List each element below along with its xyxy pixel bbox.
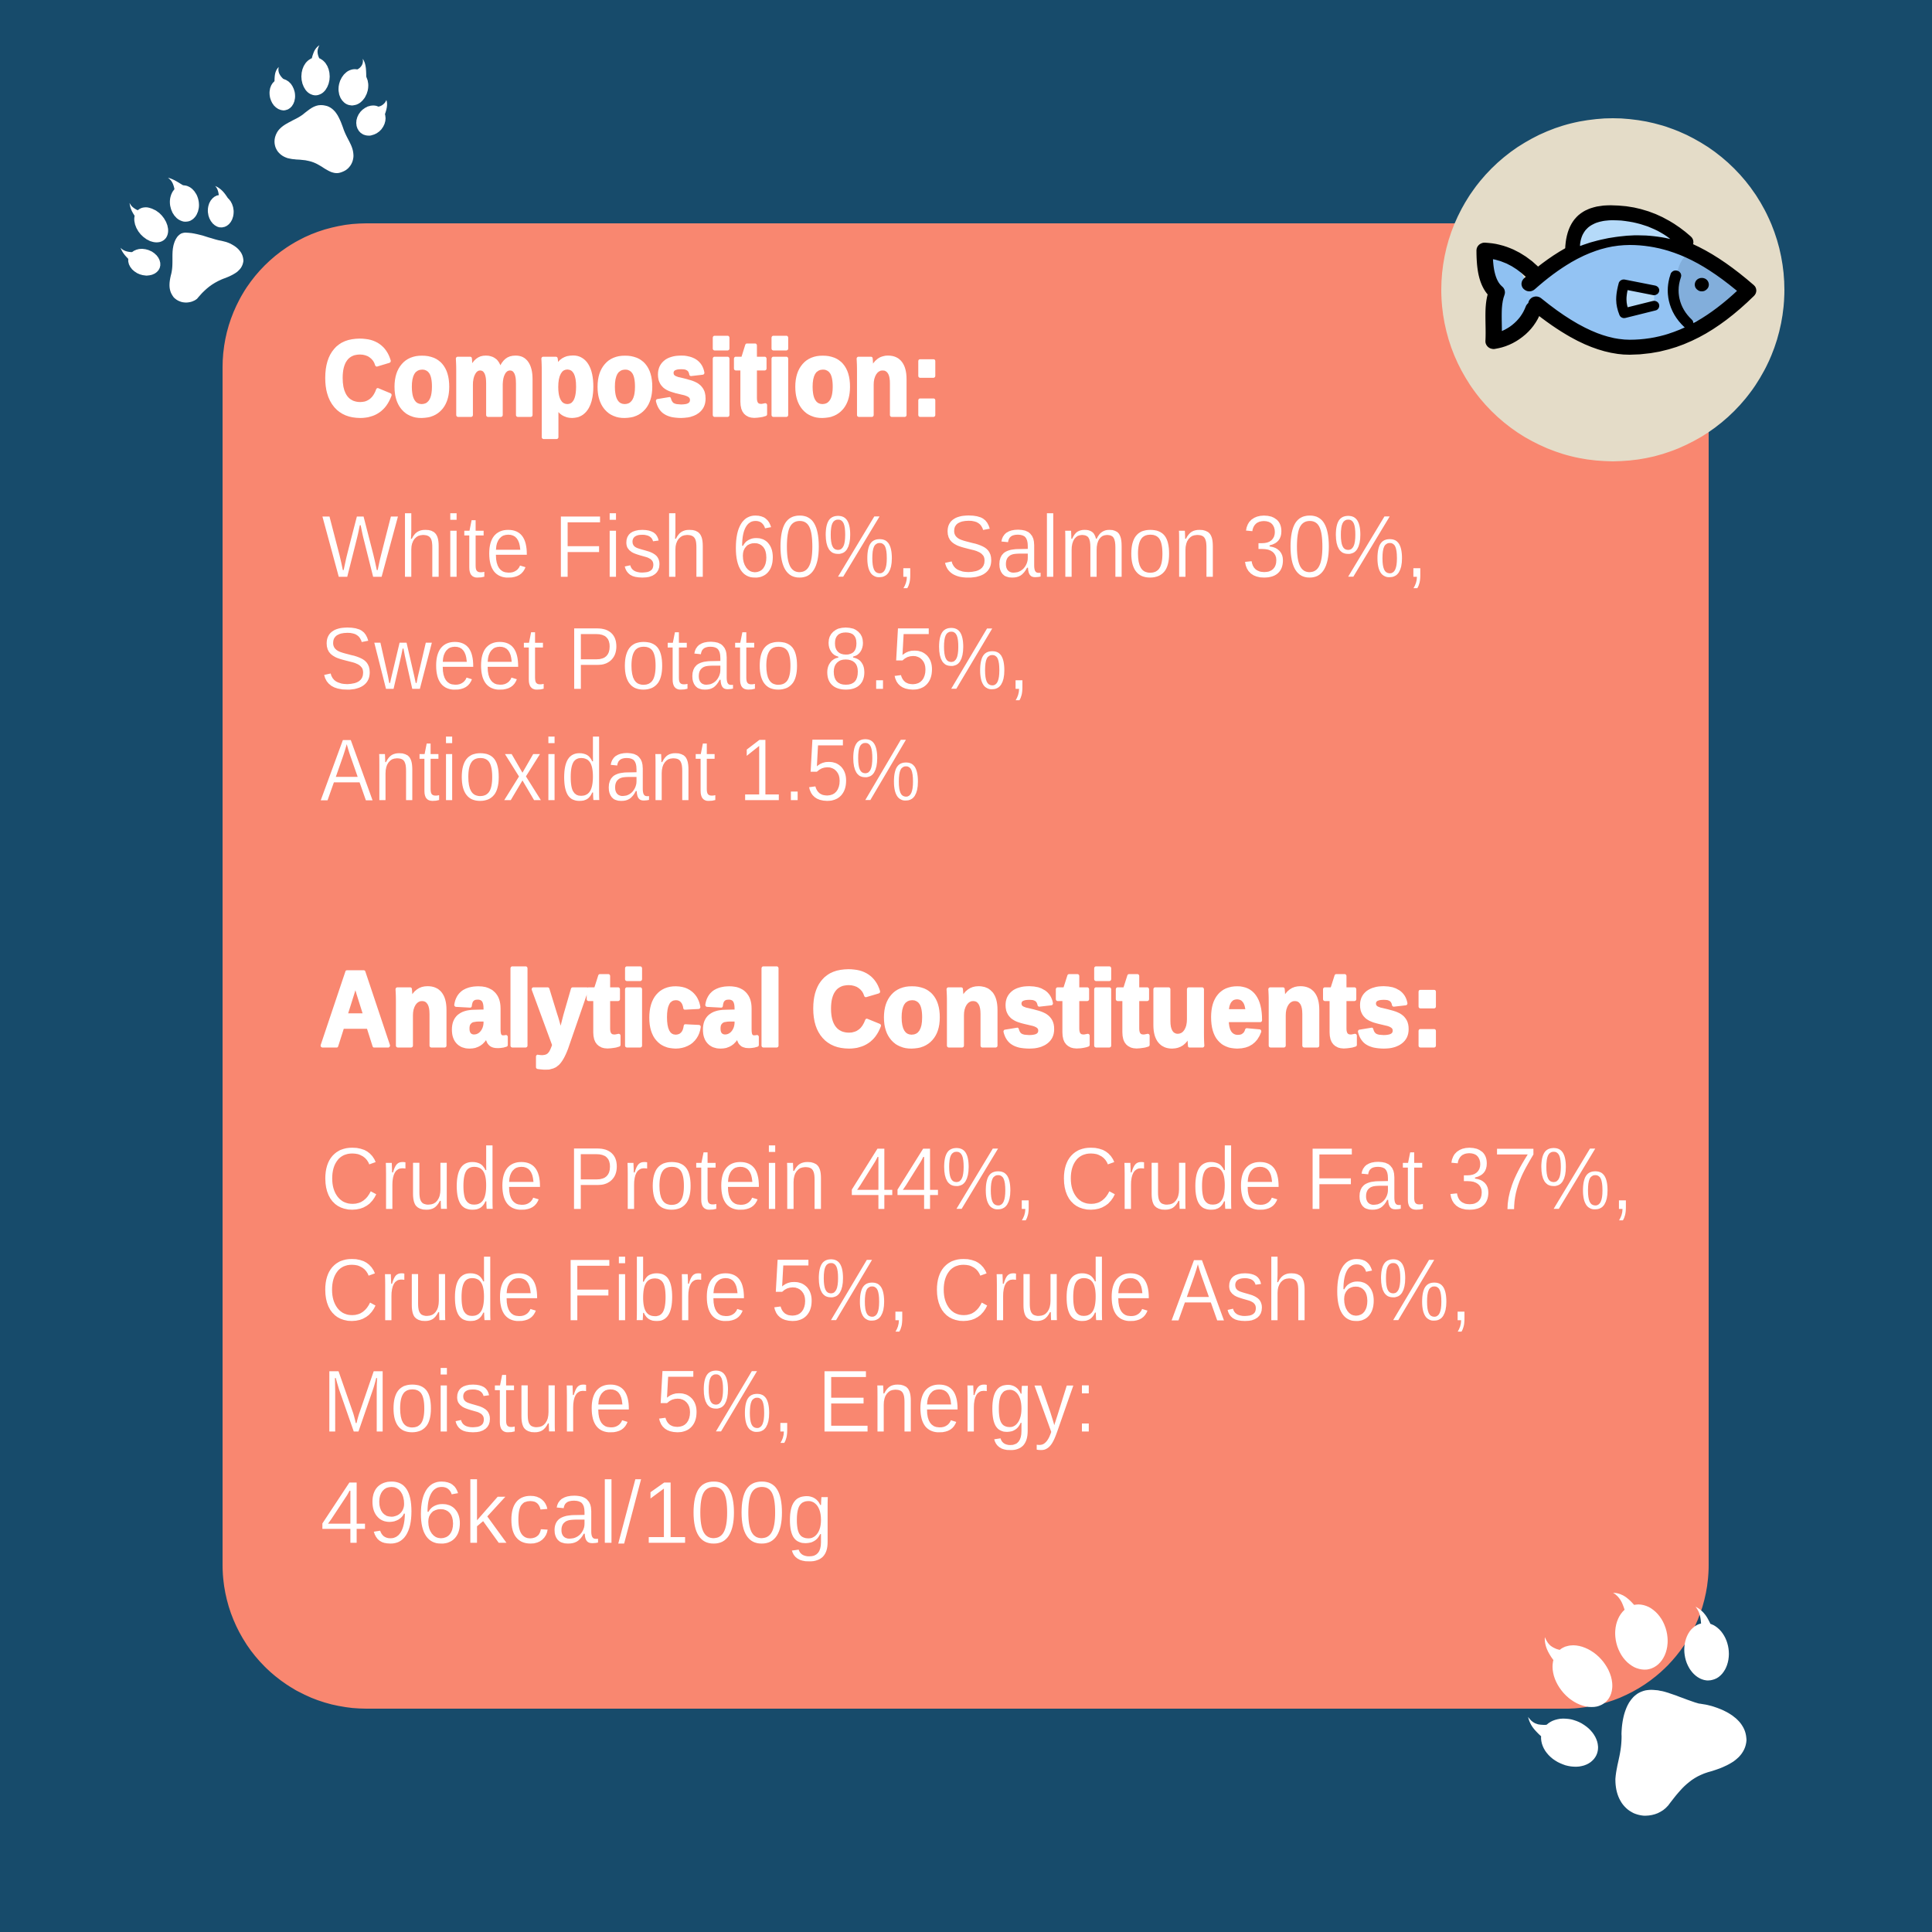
text block: composition list bbox=[320, 498, 1428, 820]
text block: composition list: White Fish 60%, Salmon 30%, bbox=[321, 498, 1428, 597]
icon: fish bbox=[1485, 213, 1748, 347]
heading: Composition: Composition: bbox=[323, 319, 943, 438]
icon: paw print top left bbox=[121, 178, 243, 302]
text block: composition list: Sweet Potato 8.5%, bbox=[320, 610, 1030, 709]
badge circle bbox=[1441, 118, 1784, 461]
icon: paw print bottom right bbox=[1528, 1593, 1747, 1816]
text block: analytical constituents list: Crude Protein 44%, Crude Fat 37%, bbox=[321, 1130, 1634, 1229]
text block: composition list: Antioxidant 1.5% bbox=[320, 721, 921, 820]
text block: analytical constituents list: Moisture 5%, Energy: bbox=[322, 1352, 1097, 1451]
text block: analytical constituents list bbox=[320, 1130, 1634, 1563]
icon: paw print top right bbox=[267, 45, 392, 173]
heading: Analytical Constituents: Analytical Constituents: bbox=[320, 950, 1444, 1069]
text block: analytical constituents list: Crude Fibre 5%, Crude Ash 6%, bbox=[321, 1241, 1472, 1340]
panel: coral card bbox=[223, 223, 1709, 1709]
text block: analytical constituents list: 496kcal/100g bbox=[320, 1464, 834, 1563]
